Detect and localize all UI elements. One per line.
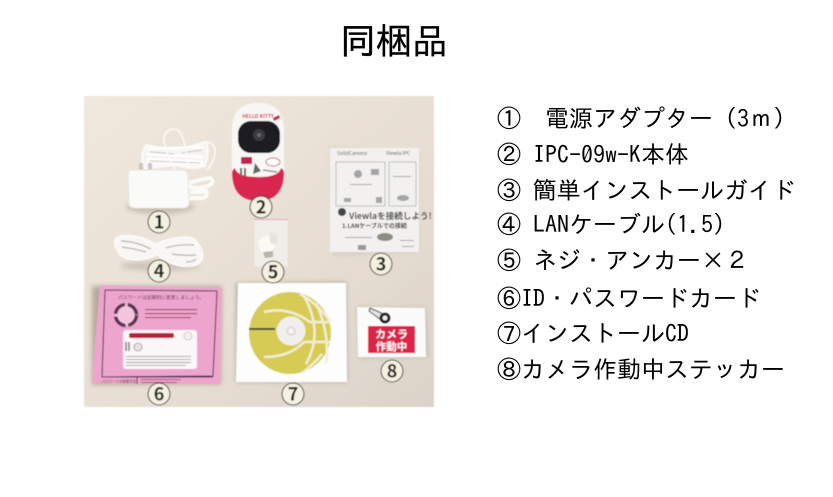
item: password card: パスワードの変更方法 — [102, 378, 137, 384]
number badges: 1 — [154, 208, 164, 234]
item: LAN cable — [115, 235, 203, 271]
item: HELLO KITTY camera body — [232, 103, 284, 201]
number badges: 6 — [154, 380, 164, 406]
list item 3: ③ 簡単インストールガイド — [497, 178, 796, 202]
item: install CD — [236, 282, 347, 382]
item: camera sticker: カメラ — [375, 326, 408, 342]
number badges: 7 — [288, 380, 298, 406]
list item 7: ⑦インストールCD — [497, 321, 689, 345]
number badges: 2 — [256, 194, 266, 220]
item: camera sticker — [357, 307, 428, 358]
item: user guide: 1.LANケーブルでの接続 — [342, 221, 407, 230]
list item 5: ⑤ ネジ・アンカー×２ — [497, 248, 749, 272]
item: HELLO KITTY camera body: HELLO KITTY — [242, 113, 274, 120]
list item 6: ⑥ID・パスワードカード — [497, 286, 761, 310]
item: password card — [92, 285, 222, 385]
item: screws and anchors bag — [254, 218, 288, 267]
item: camera sticker: 作動中 — [376, 339, 407, 354]
item: password card: パスワードは定期的に変更しましょう。 — [118, 294, 204, 301]
number badges: 4 — [154, 258, 165, 284]
list item 1: ① 電源アダプター (3ｍ) — [497, 106, 785, 130]
item: user guide — [330, 147, 432, 256]
item: user guide: SolidCamera — [337, 150, 367, 157]
item: user guide: Viewlaを接続しよう! — [348, 210, 432, 222]
number badges: 5 — [268, 258, 278, 284]
title: 同梱品 — [340, 23, 448, 59]
number badges — [148, 194, 402, 406]
item: user guide: Viewla IPC — [386, 150, 410, 157]
list item 8: ⑧カメラ作動中ステッカー — [497, 357, 785, 381]
item: AC adapter — [126, 129, 215, 214]
list item 2: ② IPC-09w-K本体 — [497, 142, 689, 166]
list item 4: ④ LANケーブル(1.5) — [497, 212, 725, 236]
number badges: 3 — [376, 250, 386, 276]
number badges: 8 — [387, 358, 397, 384]
